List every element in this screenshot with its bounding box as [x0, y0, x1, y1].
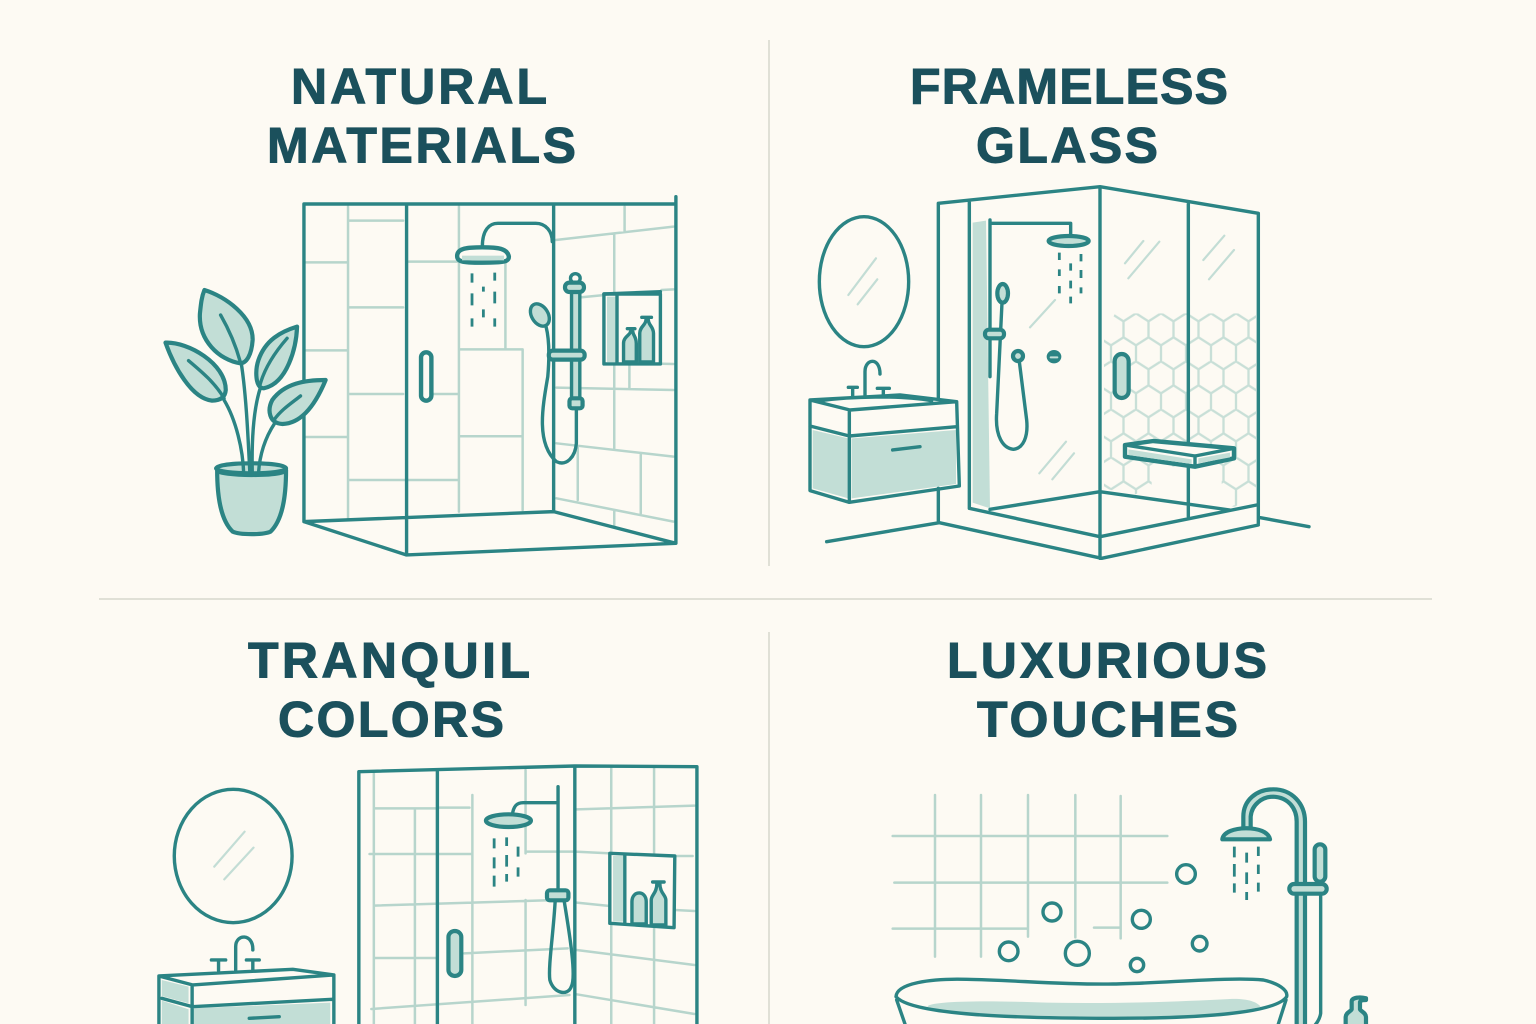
hexagon tile wall	[1104, 313, 1256, 507]
freestanding shower	[1222, 789, 1327, 1024]
icon: soap bottle	[1346, 997, 1366, 1024]
icon: round mirror	[819, 217, 909, 347]
icon: round mirror	[174, 789, 292, 923]
glass glints	[1030, 236, 1234, 479]
shaded wall strip	[973, 221, 990, 508]
panel: tranquil colors	[159, 632, 697, 1024]
bubbles	[999, 865, 1207, 972]
tile lines	[370, 768, 694, 1024]
wall niche with bottles	[610, 853, 675, 928]
icon: vanity with faucet	[159, 937, 334, 1024]
shower frame	[359, 766, 697, 1024]
heading: frameless glass	[910, 58, 1228, 174]
door handle	[1115, 354, 1129, 398]
illustration: shower with natural tile	[304, 197, 676, 555]
icon: potted plant	[165, 290, 326, 534]
panel: frameless glass	[810, 58, 1309, 558]
heading: tranquil colors: TRANQUIL	[248, 632, 530, 688]
shower set	[985, 220, 1089, 449]
panel: natural materials	[165, 58, 676, 555]
heading: tranquil colors: COLORS	[278, 692, 504, 748]
icon: vanity with faucet	[810, 361, 959, 502]
illustration: freestanding tub	[893, 789, 1366, 1024]
door handle	[421, 352, 431, 401]
heading: natural materials	[267, 58, 576, 174]
corner bench	[1125, 441, 1234, 467]
rain shower head	[457, 223, 552, 327]
heading: natural materials: NATURAL	[291, 58, 547, 114]
hand shower on rail	[527, 274, 585, 463]
wall niche with bottles	[604, 292, 660, 364]
icon: bathtub	[896, 979, 1287, 1024]
shower frame	[304, 197, 676, 555]
illustration: frameless glass shower	[810, 187, 1309, 558]
glass frame	[827, 187, 1309, 558]
heading: frameless glass: FRAMELESS	[910, 58, 1228, 114]
panel: luxurious touches	[893, 632, 1366, 1024]
tile lines	[893, 795, 1167, 957]
illustration: tiled shower with vanity	[159, 766, 697, 1024]
heading: luxurious touches: TOUCHES	[977, 692, 1238, 748]
heading: luxurious touches: LUXURIOUS	[947, 632, 1267, 688]
heading: frameless glass: GLASS	[976, 118, 1158, 174]
heading: luxurious touches	[947, 632, 1267, 748]
heading: natural materials: MATERIALS	[267, 118, 576, 174]
heading: tranquil colors	[248, 632, 530, 748]
shower head and hose	[486, 787, 573, 992]
tile lines	[306, 207, 673, 527]
door handle	[448, 931, 461, 976]
